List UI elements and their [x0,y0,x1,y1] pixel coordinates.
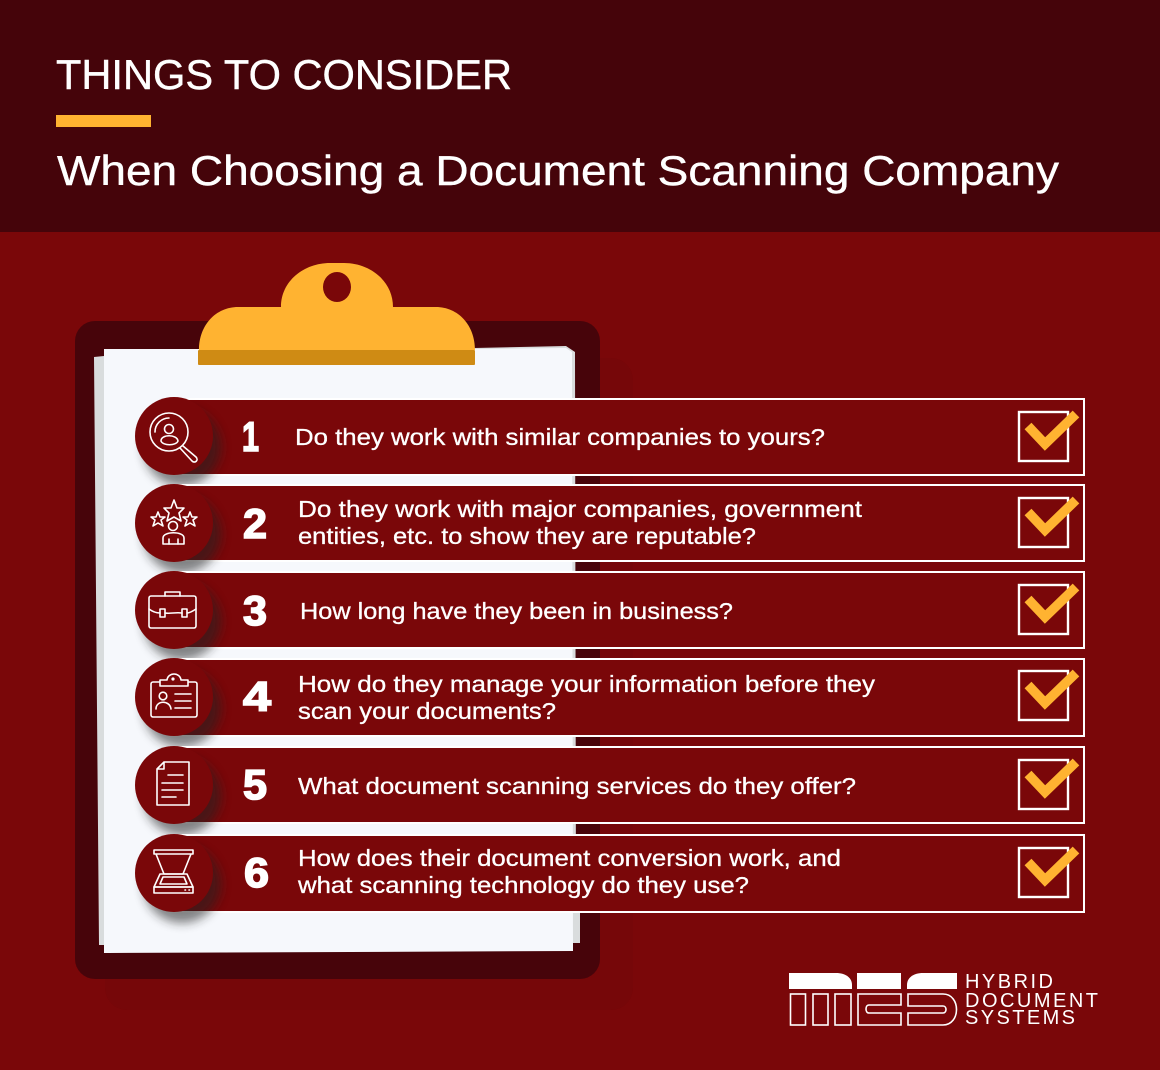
number 1: 1 [242,413,259,460]
question 6: How does their document conversion work, and [298,845,841,871]
checkbox 3 [1019,585,1076,634]
row 1 [135,397,1084,486]
title: THINGS TO CONSIDER [56,51,512,98]
logo: DOCUMENT [965,990,1098,1012]
question 4: How do they manage your information before they [298,671,876,697]
board soft shadow [105,358,633,1010]
icon: document [157,762,189,805]
question 2: Do they work with major companies, government [298,496,863,522]
checkbox 2 [1019,498,1076,547]
icon: briefcase [149,592,196,628]
row 4 [135,658,1084,747]
icon: id badge [151,674,197,717]
number 6: 6 [244,849,269,896]
row 6: what scanning technology do they use? [297,872,749,898]
row 2: entities, etc. to show they are reputable? [298,523,756,549]
icon: stars and person [151,500,197,544]
clipboard board [75,321,600,979]
number 2: 2 [243,500,267,547]
checkbox 5 [1019,760,1076,809]
icon: flatbed scanner [154,850,193,893]
row 3 [135,571,1084,660]
row 6 [135,834,1084,923]
logo: SYSTEMS [965,1007,1075,1029]
number 4: 4 [243,673,272,720]
row 2 [135,484,1084,573]
checkbox 1 [1019,412,1076,461]
clip [198,263,475,365]
accent bar [56,115,151,127]
number 5: 5 [243,761,267,808]
header band [0,0,1160,232]
row 5 [135,746,1084,835]
subtitle: When Choosing a Document Scanning Company [57,147,1059,194]
question 3: How long have they been in business? [300,598,733,624]
question 1: Do they work with similar companies to yours? [295,424,825,450]
logo text: HYBRID [965,971,1053,993]
paper sheets [94,346,580,953]
icon: magnifier with person [150,413,197,462]
question 5: What document scanning services do they offer? [298,773,856,799]
checkbox 6 [1019,848,1076,897]
number 3: 3 [243,587,267,634]
logo [789,971,1098,1029]
checkbox 4 [1019,671,1076,720]
logo mark [789,973,957,1025]
row 4: scan your documents? [298,698,556,724]
